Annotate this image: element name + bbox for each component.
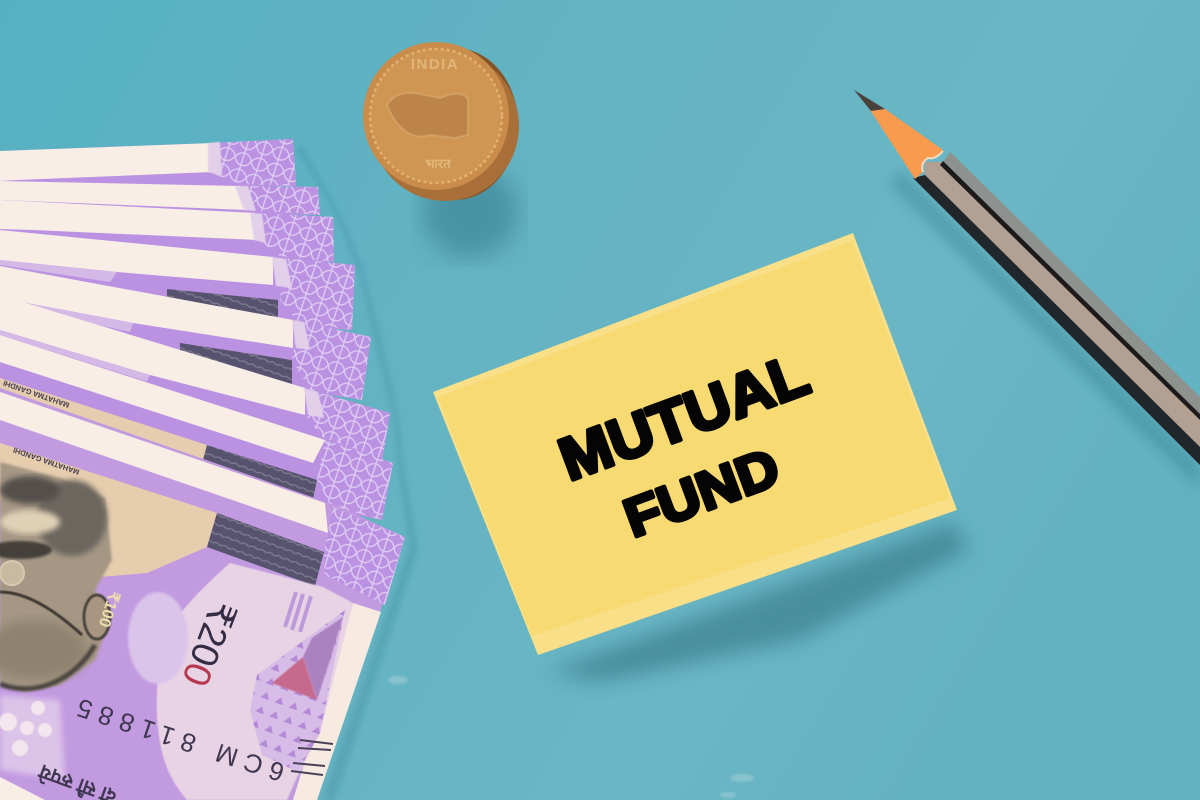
shadow of coins bbox=[422, 166, 518, 258]
pale corner bbox=[0, 695, 65, 780]
dark lower facet bbox=[913, 175, 1200, 465]
security strip bbox=[207, 513, 324, 586]
white margin strip top bbox=[0, 392, 328, 533]
note 6 bbox=[0, 295, 390, 462]
lion capital emblem bbox=[387, 93, 468, 138]
mutual fund label: FUND bbox=[616, 437, 787, 549]
note 8: front banknote bbox=[0, 388, 405, 800]
coin text bottom: भारत bbox=[425, 156, 451, 171]
bleed lines bbox=[291, 740, 333, 775]
coin text: INDIA bbox=[411, 56, 459, 73]
pad top face bbox=[438, 241, 950, 636]
note 1 bbox=[0, 139, 296, 186]
guilloche circle bbox=[128, 592, 188, 684]
note 2 bbox=[0, 181, 320, 215]
triangle motif bbox=[250, 610, 345, 772]
tan facet bbox=[925, 162, 1200, 449]
shadow under sticky note bbox=[548, 522, 968, 682]
denomination: ₹200 bbox=[173, 595, 244, 692]
note 4 bbox=[0, 230, 355, 330]
front note body bbox=[0, 388, 405, 800]
note 5 bbox=[0, 266, 371, 400]
mutual fund label: MUTUAL bbox=[550, 340, 817, 493]
banknote fan bbox=[0, 139, 405, 800]
rose triangle bbox=[272, 657, 317, 700]
stacked coins bbox=[363, 42, 519, 201]
note 3 bbox=[0, 200, 334, 262]
white flowers dots bbox=[0, 701, 52, 756]
bottom left white corner bbox=[0, 777, 45, 800]
graphite tip bbox=[854, 90, 885, 111]
mauve triangle bbox=[303, 617, 343, 700]
pale oval bbox=[157, 563, 353, 800]
small note text lower: MAHATMA GANDHI bbox=[12, 445, 81, 477]
shadow of pencil bbox=[890, 170, 1200, 490]
end pattern bbox=[324, 507, 405, 605]
tan portrait panel bbox=[0, 443, 217, 577]
pencil bbox=[854, 90, 1200, 465]
sharpened wood bbox=[870, 109, 943, 179]
serial number: 6CM 811885 bbox=[73, 693, 288, 788]
braille bars bbox=[285, 592, 311, 632]
portrait: Gandhi head bbox=[0, 462, 112, 692]
small note text upper: MAHATMA GANDHI bbox=[2, 378, 71, 410]
right white margin bbox=[293, 603, 381, 800]
yellow sticky note pad bbox=[433, 233, 957, 655]
paint specks on surface bbox=[388, 676, 754, 798]
shadow of banknotes bbox=[296, 145, 418, 800]
centre black line bbox=[940, 161, 1200, 420]
denomination small: ₹100 bbox=[95, 589, 122, 629]
gray facet bbox=[943, 152, 1200, 418]
note 7 bbox=[0, 335, 393, 520]
scalloped edge bbox=[922, 151, 943, 172]
